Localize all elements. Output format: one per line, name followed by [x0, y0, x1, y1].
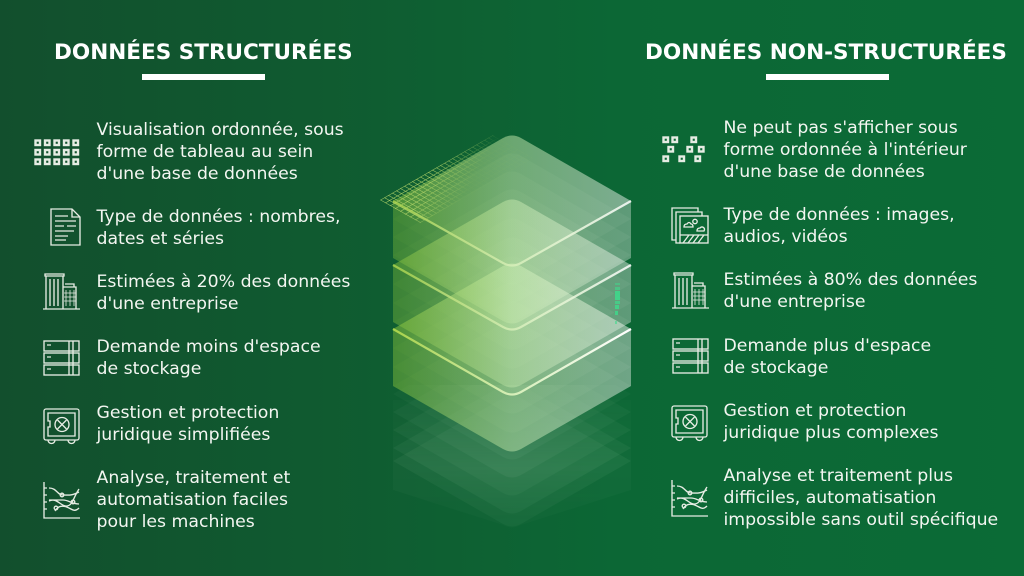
text: analyse plus difficile: impossible sans outil spécifique — [724, 510, 998, 530]
text: analyse facile: automatisation faciles — [96, 490, 288, 510]
text: moins d'espace — [96, 336, 321, 378]
top layer — [393, 136, 631, 324]
text: estimées à 80% — [724, 270, 977, 312]
icon: line chart — [671, 480, 708, 517]
middle layer — [393, 200, 631, 388]
text: gestion et protection simplifiées: Gestion et protection — [96, 402, 279, 422]
text: analyse facile: Analyse, traitement et — [96, 468, 290, 488]
text: visualisation ordonnée: Visualisation ordonnée, sous — [96, 120, 344, 140]
icon: server storage — [672, 338, 709, 374]
text: moins d'espace: Demande moins d'espace — [96, 336, 321, 356]
icon: table grid — [34, 139, 80, 166]
text: ne peut pas s'afficher: d'une base de données — [724, 162, 925, 182]
icon: scattered squares — [662, 136, 705, 162]
text: type de données: Type de données : nombres, — [96, 206, 340, 226]
text: analyse plus difficile: difficiles, automatisation — [724, 488, 936, 508]
text: plus d'espace: Demande plus d'espace — [724, 336, 931, 356]
icon: document — [50, 208, 81, 246]
icon: safe — [671, 405, 708, 442]
text: ne peut pas s'afficher: Ne peut pas s'afficher sous — [724, 118, 958, 138]
reflection of the stack — [394, 385, 630, 526]
text: visualisation ordonnée: d'une base de données — [96, 164, 298, 184]
text: estimées à 20% — [96, 272, 350, 314]
small green data marks — [615, 283, 620, 324]
icon: buildings — [43, 273, 80, 310]
text: gestion et protection simplifiées: juridique simplifiées — [96, 424, 270, 444]
text: estimées à 80%: d'une entreprise — [724, 292, 865, 312]
text: visualisation ordonnée: forme de tableau au sein — [96, 142, 313, 162]
icon: safe — [43, 408, 80, 444]
text: type de données: dates et séries — [96, 228, 224, 248]
heading: données non-structurées: DONNÉES NON-STRUCTURÉES — [645, 40, 1007, 64]
text: analyse facile: pour les machines — [96, 512, 255, 532]
text: estimées à 20%: d'une entreprise — [96, 294, 238, 314]
icon: line chart — [43, 482, 80, 519]
heading: données structurées: DONNÉES STRUCTURÉES — [54, 40, 353, 64]
text: type de données images — [723, 204, 955, 246]
text: gestion plus complexes: juridique plus complexes — [724, 422, 939, 442]
text: moins d'espace: de stockage — [96, 358, 201, 378]
icon: image stack — [671, 207, 709, 244]
text: gestion et protection simplifiées — [96, 402, 279, 444]
text: visualisation ordonnée — [96, 120, 344, 184]
text: plus d'espace — [724, 336, 931, 378]
text: gestion plus complexes: Gestion et protection — [724, 400, 906, 420]
text: analyse plus difficile: Analyse et traitement plus — [724, 466, 953, 486]
text: ne peut pas s'afficher — [724, 118, 967, 182]
text: type de données images: audios, vidéos — [724, 226, 848, 246]
underline: right heading — [766, 74, 889, 80]
text: ne peut pas s'afficher: forme ordonnée à l'intérieur — [724, 140, 967, 160]
text: estimées à 20%: Estimées à 20% des données — [96, 272, 350, 292]
bottom layer — [393, 264, 631, 452]
text: analyse plus difficile — [724, 466, 998, 530]
grid overlay — [380, 135, 498, 223]
icon: buildings — [672, 272, 709, 309]
underline: left heading — [142, 74, 265, 80]
text: estimées à 80%: Estimées à 80% des données — [724, 270, 977, 290]
text: analyse facile — [96, 468, 290, 532]
text: gestion plus complexes — [723, 400, 939, 442]
text: plus d'espace: de stockage — [724, 358, 828, 378]
glowing layer edges — [393, 201, 631, 394]
text: type de données images: Type de données : images, — [724, 204, 955, 224]
icon: server storage — [43, 340, 80, 376]
illustration: stacked data layers — [380, 135, 632, 526]
text: type de données — [96, 206, 340, 248]
